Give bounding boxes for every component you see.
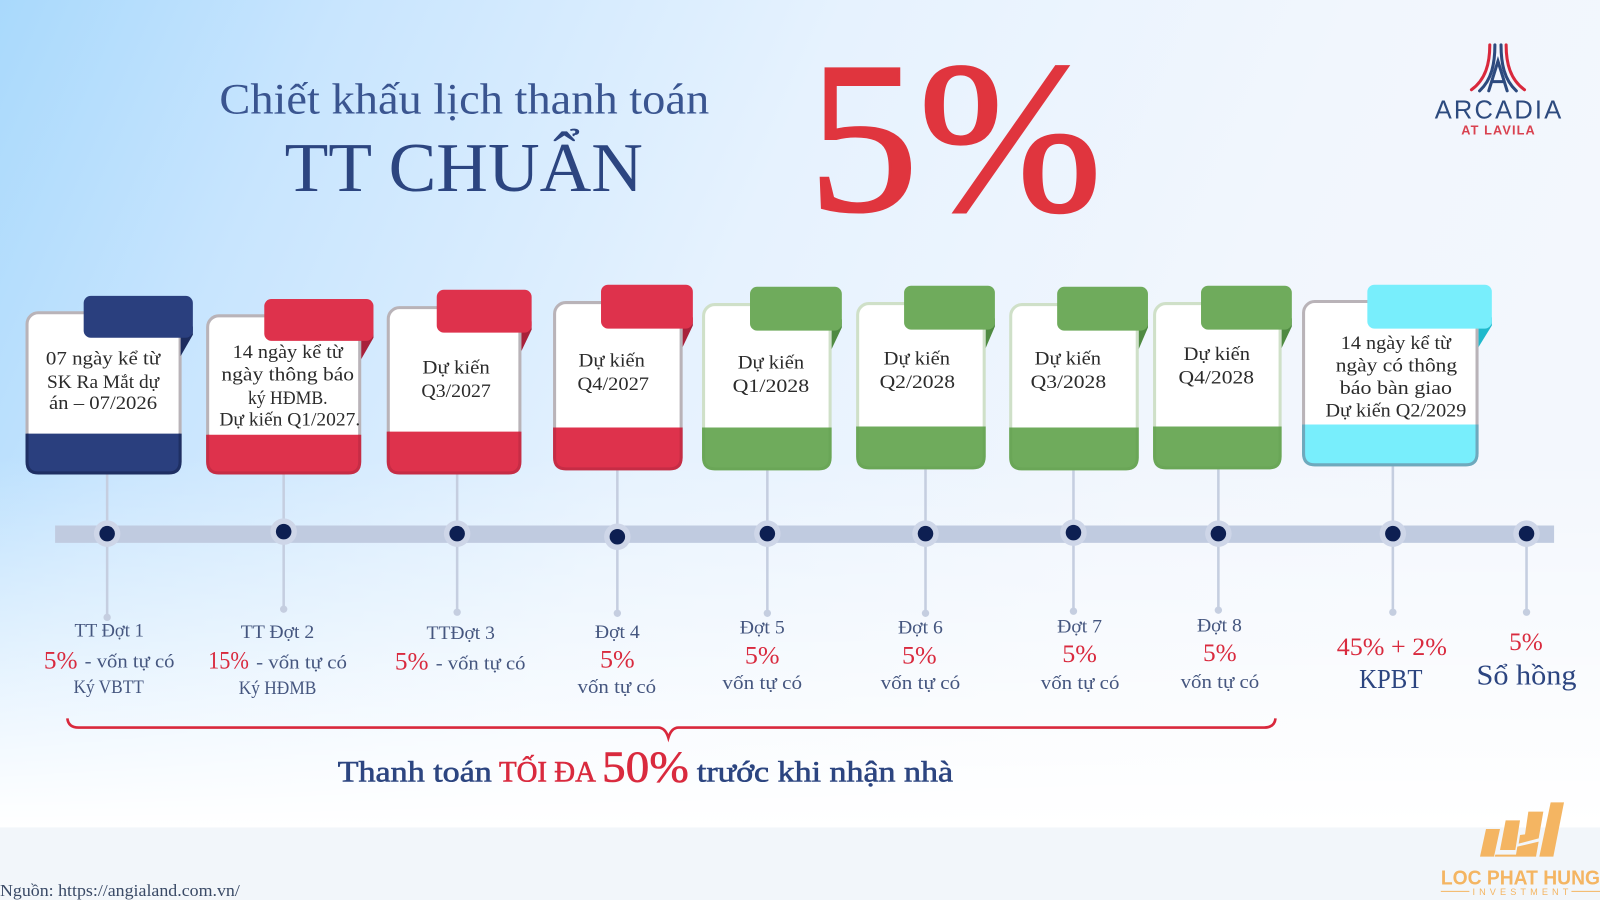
big percentage: 5% [808,17,1102,257]
label: đợt 6 [881,618,960,694]
label: đợt 4: vốn tự có [578,677,656,698]
title line 2: TT CHUẨN [285,129,643,207]
label: đợt 3: TTĐợt 3 [427,623,495,644]
card 2: Dự kiến Q1/2027. [219,410,360,431]
card 7: Q3/2028 [1031,372,1106,393]
label: đợt 2: - vốn tự có [256,652,347,673]
card 6 [858,286,995,468]
label: KPBT: 45% + 2% [1337,632,1447,661]
card 1 [27,296,193,473]
label: đợt 7: Đợt 7 [1057,617,1102,638]
label: đợt 3: 5% [395,646,429,675]
label: đợt 2: 15% [208,645,249,674]
card 9: báo bàn giao [1340,378,1452,399]
card 9: 14 ngày kể từ [1341,333,1453,354]
card 6: Dự kiến [884,348,950,369]
label: đợt 4 [578,622,656,698]
label: đợt 5: vốn tự có [722,673,802,694]
summary text: Thanh toán [338,757,492,789]
card 7 [1011,287,1148,469]
label: đợt 8: Đợt 8 [1197,616,1242,637]
label: KPBT: KPBT [1359,663,1423,694]
label: đợt 2: TT Đợt 2 [241,622,314,643]
label: đợt 6: vốn tự có [881,673,960,694]
card 5: Q1/2028 [733,376,809,397]
label: đợt 2: Ký HĐMB [239,678,316,699]
logo: Arcadia at Lavila [1435,45,1561,138]
card 9 [1304,285,1492,465]
card 6: Q2/2028 [880,372,955,393]
milestone dots [94,518,1540,550]
card 8: Q4/2028 [1179,368,1254,389]
card 2: ký HĐMB. [248,388,328,409]
logo subtitle: AT LAVILA [1461,123,1535,138]
label: đợt 2 [208,622,347,699]
label: KPBT [1337,632,1447,694]
card 2: 14 ngày kể từ [233,342,344,363]
card 1: SK Ra Mắt dự [47,372,161,393]
milestone stems [103,466,1530,621]
summary text: 50% [602,742,689,792]
label: đợt 7 [1041,617,1119,694]
card 2: ngày thông báo [221,365,354,386]
card 5: Dự kiến [738,352,804,373]
card 8 [1155,286,1292,468]
label: đợt 1 [44,621,174,698]
label: đợt 1: 5% [44,645,78,674]
label: đợt 3: - vốn tự có [436,653,526,674]
card 5 [704,287,842,469]
label: đợt 5 [722,618,802,694]
card 9: Dự kiến Q2/2029 [1326,400,1466,421]
card 4: Dự kiến [579,350,645,371]
label: đợt 7: vốn tự có [1041,673,1119,694]
card 9: ngày có thông [1336,355,1457,376]
card 2 [208,299,373,473]
title line 1: Chiết khấu lịch thanh toán [219,76,709,123]
label: đợt 8: vốn tự có [1181,672,1259,693]
card 8: Dự kiến [1184,344,1250,365]
label: đợt 5: 5% [745,640,780,669]
label: đợt 8: 5% [1203,638,1237,667]
brace [67,718,1276,738]
label: đợt 5: Đợt 5 [740,618,785,639]
card 4 [555,285,693,469]
label: đợt 6: 5% [902,640,937,669]
card 3: Dự kiến [422,357,490,378]
card 3: Q3/2027 [421,381,491,402]
label: Sổ hồng [1477,627,1577,692]
source note: Nguồn: https://angialand.com.vn/ [0,881,240,900]
label: đợt 8 [1181,616,1259,693]
logo: Loc Phat Hung [1441,802,1600,897]
label: Sổ hồng: 5% [1509,627,1543,656]
label: đợt 4: 5% [600,644,635,673]
label: đợt 1: Ký VBTT [73,677,144,698]
timeline bar [55,526,1554,543]
card 1: án – 07/2026 [49,393,157,414]
logo mark [1480,802,1564,857]
card 3 [388,290,532,473]
label: đợt 3 [395,623,526,675]
logo tagline: INVESTMENT [1472,887,1569,897]
card 7: Dự kiến [1035,348,1101,369]
card 1: 07 ngày kể từ [46,348,162,369]
label: đợt 1: - vốn tự có [85,651,174,672]
title [219,76,709,207]
logo icon [1471,45,1524,91]
summary text: TỐI ĐA [499,755,597,789]
summary text [338,742,953,792]
label: đợt 7: 5% [1062,639,1097,668]
label: đợt 6: Đợt 6 [898,618,943,639]
card 4: Q4/2027 [578,374,649,395]
logo name: ARCADIA [1435,96,1561,124]
summary text: trước khi nhận nhà [697,757,953,789]
label: Sổ hồng: Sổ hồng [1477,661,1577,692]
label: đợt 1: TT Đợt 1 [74,621,144,642]
label: đợt 4: Đợt 4 [595,622,640,643]
